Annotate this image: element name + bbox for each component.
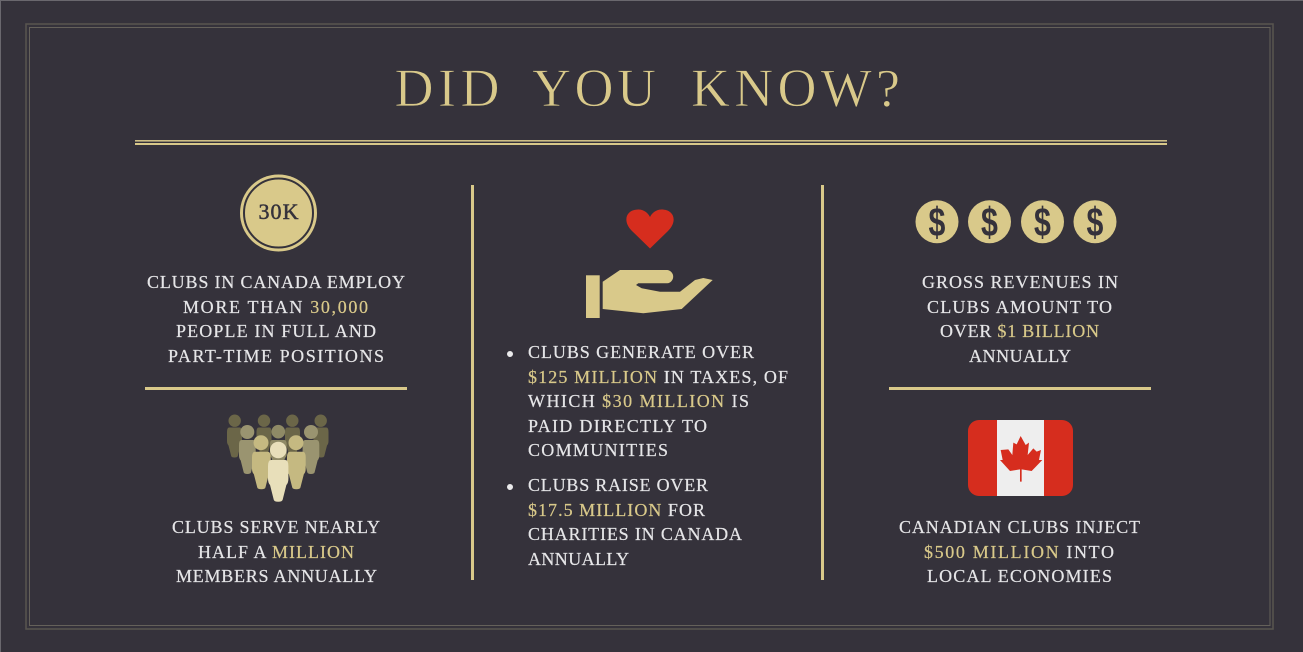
text: economies stat: LOCAL ECONOMIES: [927, 566, 1112, 586]
text: revenue stat: CLUBS AMOUNT TO: [927, 297, 1112, 317]
bullet: taxes: $125 MILLION IN TAXES, OF: [528, 367, 788, 387]
divider right column: [889, 387, 1151, 390]
text: revenue stat: GROSS REVENUES IN: [922, 272, 1118, 292]
bullet: taxes: [507, 342, 788, 460]
bullet: taxes: COMMUNITIES: [528, 440, 668, 460]
icon: Canadian flag: [968, 420, 1073, 496]
text: members stat: HALF A MILLION: [198, 542, 354, 562]
text: economies stat: [899, 517, 1140, 586]
bullet: taxes: CLUBS GENERATE OVER: [528, 342, 754, 362]
icon: 30K badge: [240, 174, 317, 252]
title double rule: [135, 140, 1167, 145]
text: members stat: MEMBERS ANNUALLY: [176, 566, 377, 586]
icon: 30K badge: 30K: [258, 199, 299, 224]
title: YOU: [532, 58, 656, 118]
text: members stat: CLUBS SERVE NEARLY: [172, 517, 380, 537]
icon: open hand: [586, 270, 713, 318]
panel: members: [172, 414, 380, 586]
icon: dollar coins: [916, 198, 1116, 245]
icon: dollar coins: $: [929, 198, 945, 245]
bullet: charities: [507, 475, 742, 569]
icon: dollar coins: $: [1087, 198, 1103, 245]
bullet: taxes: PAID DIRECTLY TO: [528, 416, 707, 436]
text: employment stat: PEOPLE IN FULL AND: [176, 321, 376, 341]
column divider right: [821, 185, 824, 580]
text: revenue stat: ANNUALLY: [969, 346, 1071, 366]
bullet: charities: $17.5 MILLION FOR: [528, 500, 705, 520]
panel: employment: [147, 174, 405, 366]
title: [394, 58, 900, 118]
bullet: taxes: WHICH $30 MILLION IS: [528, 391, 749, 411]
bullet: charities: ANNUALLY: [528, 549, 629, 569]
text: economies stat: $500 MILLION INTO: [924, 542, 1114, 562]
text: economies stat: CANADIAN CLUBS INJECT: [899, 517, 1140, 537]
icon: group of people: [227, 414, 328, 502]
divider left column: [145, 387, 407, 390]
text: employment stat: CLUBS IN CANADA EMPLOY: [147, 272, 405, 292]
icon: dollar coins: $: [1034, 198, 1051, 245]
column divider left: [471, 185, 474, 580]
text: employment stat: PART-TIME POSITIONS: [168, 346, 384, 366]
title: KNOW?: [691, 58, 900, 118]
text: employment stat: MORE THAN 30,000: [183, 297, 368, 317]
bullet: charities: CLUBS RAISE OVER: [528, 475, 708, 495]
text: members stat: [172, 517, 380, 586]
text: revenue stat: [922, 272, 1118, 366]
panel: community giving: [507, 210, 788, 569]
bullet: charities: CHARITIES IN CANADA: [528, 524, 742, 544]
text: employment stat: [147, 272, 405, 366]
panel: revenues: [916, 198, 1118, 366]
text: revenue stat: OVER $1 BILLION: [940, 321, 1099, 341]
icon: heart: [626, 210, 674, 248]
panel: local economies: [899, 420, 1140, 586]
icon: dollar coins: $: [981, 198, 998, 245]
title: DID: [394, 58, 500, 118]
